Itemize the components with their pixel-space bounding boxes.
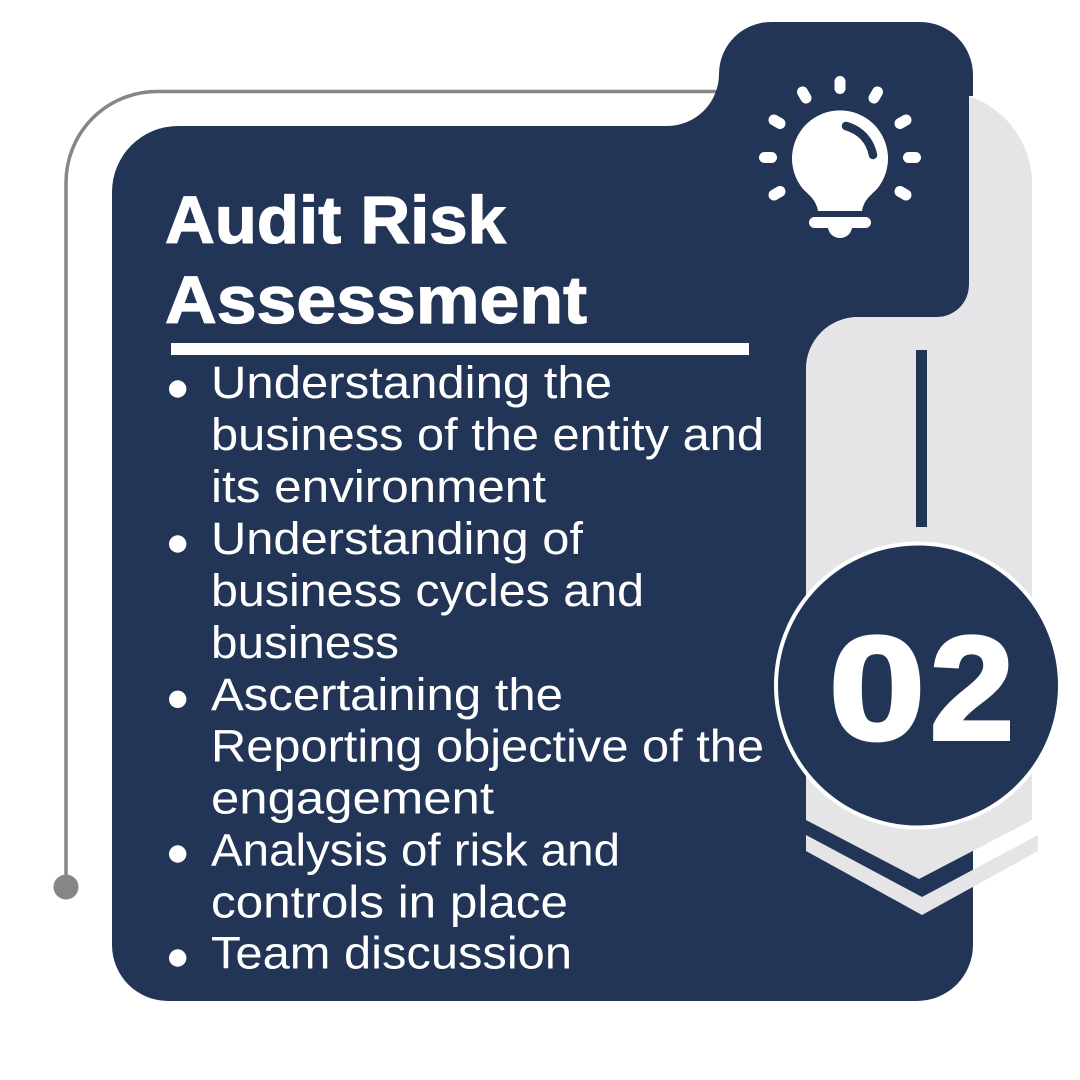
bullet item 4: controls in place — [211, 876, 568, 927]
connector line with end dot — [54, 92, 720, 900]
bullet item 1: Understanding the — [211, 357, 612, 408]
bullet item 2 — [169, 513, 644, 668]
vertical bar — [916, 350, 927, 527]
panel: navy main card — [112, 22, 973, 1001]
bullet item 3: Ascertaining the — [211, 669, 563, 720]
bullet item 3 — [169, 669, 764, 823]
bullet item 1: its environment — [211, 461, 547, 512]
bullet item 3: Reporting objective of the — [211, 720, 764, 772]
bullet item 2: Understanding of — [211, 513, 584, 564]
title: Audit Risk — [165, 183, 507, 258]
bullet item 5: Team discussion — [211, 928, 572, 979]
title underline — [171, 343, 749, 355]
bullet item 2: business cycles and — [211, 565, 644, 616]
title: Assessment — [165, 263, 587, 338]
icon: light bulb — [764, 82, 916, 238]
number badge — [776, 544, 1060, 828]
number badge: 2 — [930, 607, 1014, 771]
bullet item 4: Analysis of risk and — [211, 824, 620, 875]
bullet list — [169, 357, 764, 979]
number badge: 0 — [829, 607, 925, 771]
bullet item 1: business of the entity and — [211, 409, 764, 460]
panel: grey side ribbon — [806, 96, 1032, 879]
bullet item 2: business — [211, 617, 399, 668]
bullet item 1 — [169, 357, 764, 512]
bullet item 4 — [169, 824, 620, 927]
title — [165, 183, 587, 338]
bullet item 3: engagement — [211, 772, 495, 823]
chevron below ribbon — [806, 835, 1038, 915]
